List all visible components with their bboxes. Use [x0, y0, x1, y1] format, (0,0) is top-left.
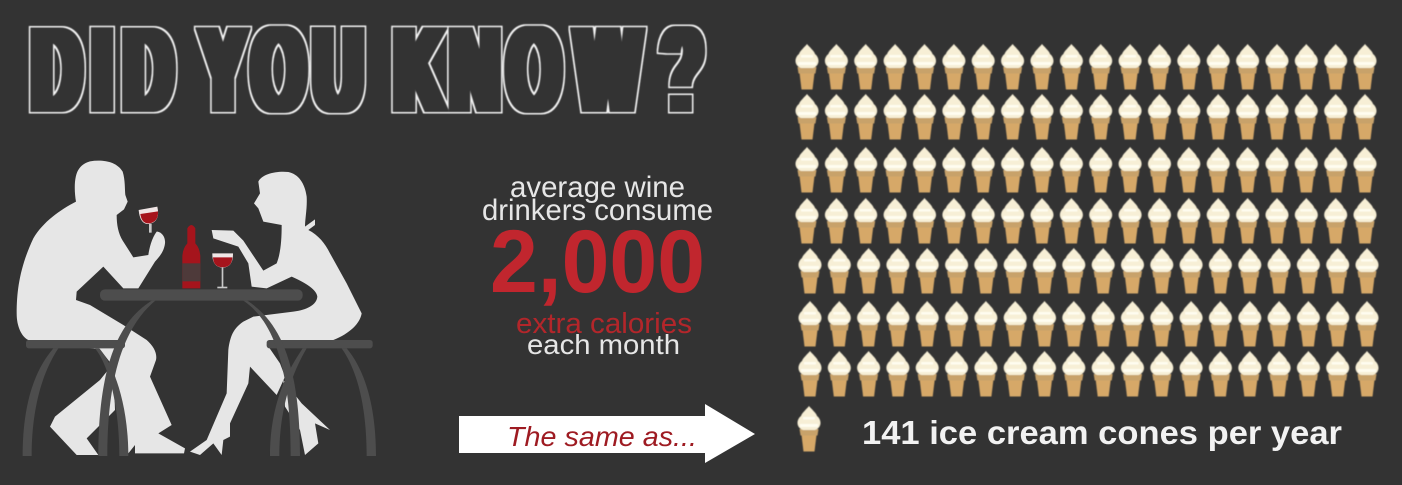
- ice cream cone grid: [796, 44, 1378, 452]
- text: the same as: The same as...: [507, 421, 697, 452]
- icon: wine glass in hand: [139, 207, 158, 233]
- text: average wine: average wine: [510, 171, 685, 204]
- icon: wine bottle: [182, 225, 200, 288]
- row 3 of cones: [796, 147, 1376, 192]
- title: DID YOU KNOW?: [32, 1, 703, 138]
- silhouette: man: [17, 161, 185, 455]
- text: each month: each month: [527, 329, 680, 360]
- row 7 of cones: [798, 351, 1378, 396]
- row 1 of cones: [796, 44, 1376, 90]
- furniture: table and stools: [23, 289, 376, 456]
- row 4 of cones: [796, 198, 1376, 244]
- silhouette: woman: [190, 172, 362, 455]
- row 2 of cones: [796, 94, 1376, 140]
- text: extra calories: extra calories: [516, 308, 692, 340]
- caption: 141 ice cream cones per year: 141 ice cream cones per year: [862, 414, 1342, 451]
- row 6 of cones: [798, 301, 1378, 346]
- row 5 of cones: [798, 248, 1378, 294]
- text: drinkers consume: drinkers consume: [482, 194, 713, 227]
- arrow: the same as: [459, 404, 755, 463]
- icon: wine glass on table: [212, 253, 233, 288]
- text block: wine calories: [482, 171, 713, 360]
- number: 2,000: 2,000: [490, 211, 705, 311]
- illustration: couple drinking wine at a table: [17, 161, 376, 456]
- final single cone: [798, 406, 820, 452]
